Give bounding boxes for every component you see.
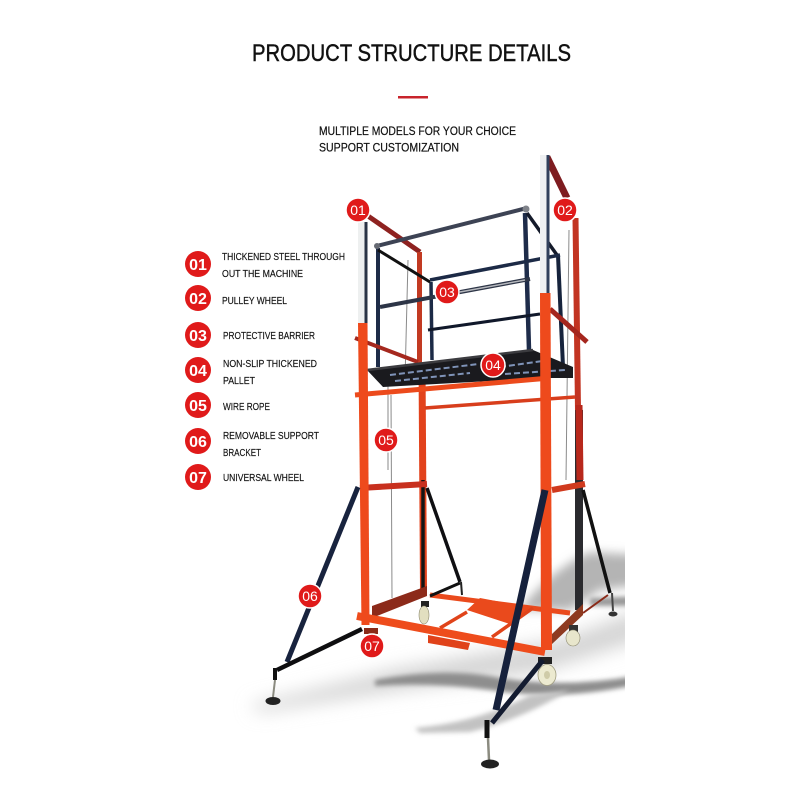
title: PRODUCT STRUCTURE DETAILS — [252, 40, 571, 67]
red accent line — [398, 96, 428, 98]
legend item 05: WIRE ROPE — [223, 402, 270, 413]
callout 03 — [435, 280, 459, 304]
legend item 02 — [185, 285, 287, 311]
callout 01 — [346, 198, 370, 222]
legend item 04: 04 — [189, 363, 207, 380]
legend item 06 — [185, 428, 319, 459]
support brackets — [266, 487, 618, 768]
front posts — [358, 155, 552, 650]
rear posts — [420, 218, 580, 610]
callout 04 — [481, 353, 505, 377]
mid beams — [355, 378, 585, 490]
legend item 02: PULLEY WHEEL — [222, 296, 287, 307]
legend item 03: 03 — [189, 328, 207, 345]
legend item 02: 02 — [189, 291, 207, 308]
legend item 01: OUT THE MACHINE — [222, 269, 303, 280]
callout 05: 05 — [378, 432, 394, 448]
non-slip pallet — [367, 350, 573, 387]
legend item 06: 06 — [189, 434, 207, 451]
infographic canvas — [185, 44, 625, 768]
legend item 03: PROTECTIVE BARRIER — [223, 331, 315, 342]
legend item 07 — [185, 464, 304, 490]
top dark red rear beams — [368, 157, 567, 252]
legend item 05 — [185, 392, 270, 418]
legend item 05: 05 — [189, 398, 207, 415]
legend item 07: UNIVERSAL WHEEL — [223, 473, 304, 484]
universal wheels — [364, 601, 580, 686]
callout 04: 04 — [485, 357, 501, 373]
subtitle: MULTIPLE MODELS FOR YOUR CHOICE — [319, 126, 516, 138]
lower frame — [357, 586, 583, 652]
legend item 04 — [185, 357, 317, 387]
callout 06: 06 — [302, 588, 318, 604]
callout 05 — [374, 428, 398, 452]
legend item 06: REMOVABLE SUPPORT — [223, 431, 319, 442]
legend item 04: PALLET — [223, 376, 255, 387]
legend item 06: BRACKET — [223, 448, 261, 459]
callout 03: 03 — [439, 284, 455, 300]
legend — [185, 251, 345, 490]
side rails — [355, 309, 587, 362]
legend item 03 — [185, 322, 315, 348]
callout 07: 07 — [364, 638, 380, 654]
legend item 07: 07 — [189, 470, 207, 487]
callout 07 — [360, 634, 384, 658]
legend item 01: THICKENED STEEL THROUGH — [222, 252, 345, 263]
subtitle: SUPPORT CUSTOMIZATION — [319, 142, 459, 154]
legend item 01: 01 — [189, 257, 207, 274]
callout 01: 01 — [350, 202, 366, 218]
callout 02 — [553, 198, 577, 222]
floor shadow — [250, 552, 640, 733]
legend item 04: NON-SLIP THICKENED — [223, 359, 317, 370]
scaffold machine — [266, 155, 618, 768]
callout 06 — [298, 584, 322, 608]
legend item 01 — [185, 251, 345, 280]
wire rope — [388, 230, 569, 598]
callout 02: 02 — [557, 202, 573, 218]
subtitle — [319, 126, 516, 154]
barrier rails — [374, 206, 563, 367]
